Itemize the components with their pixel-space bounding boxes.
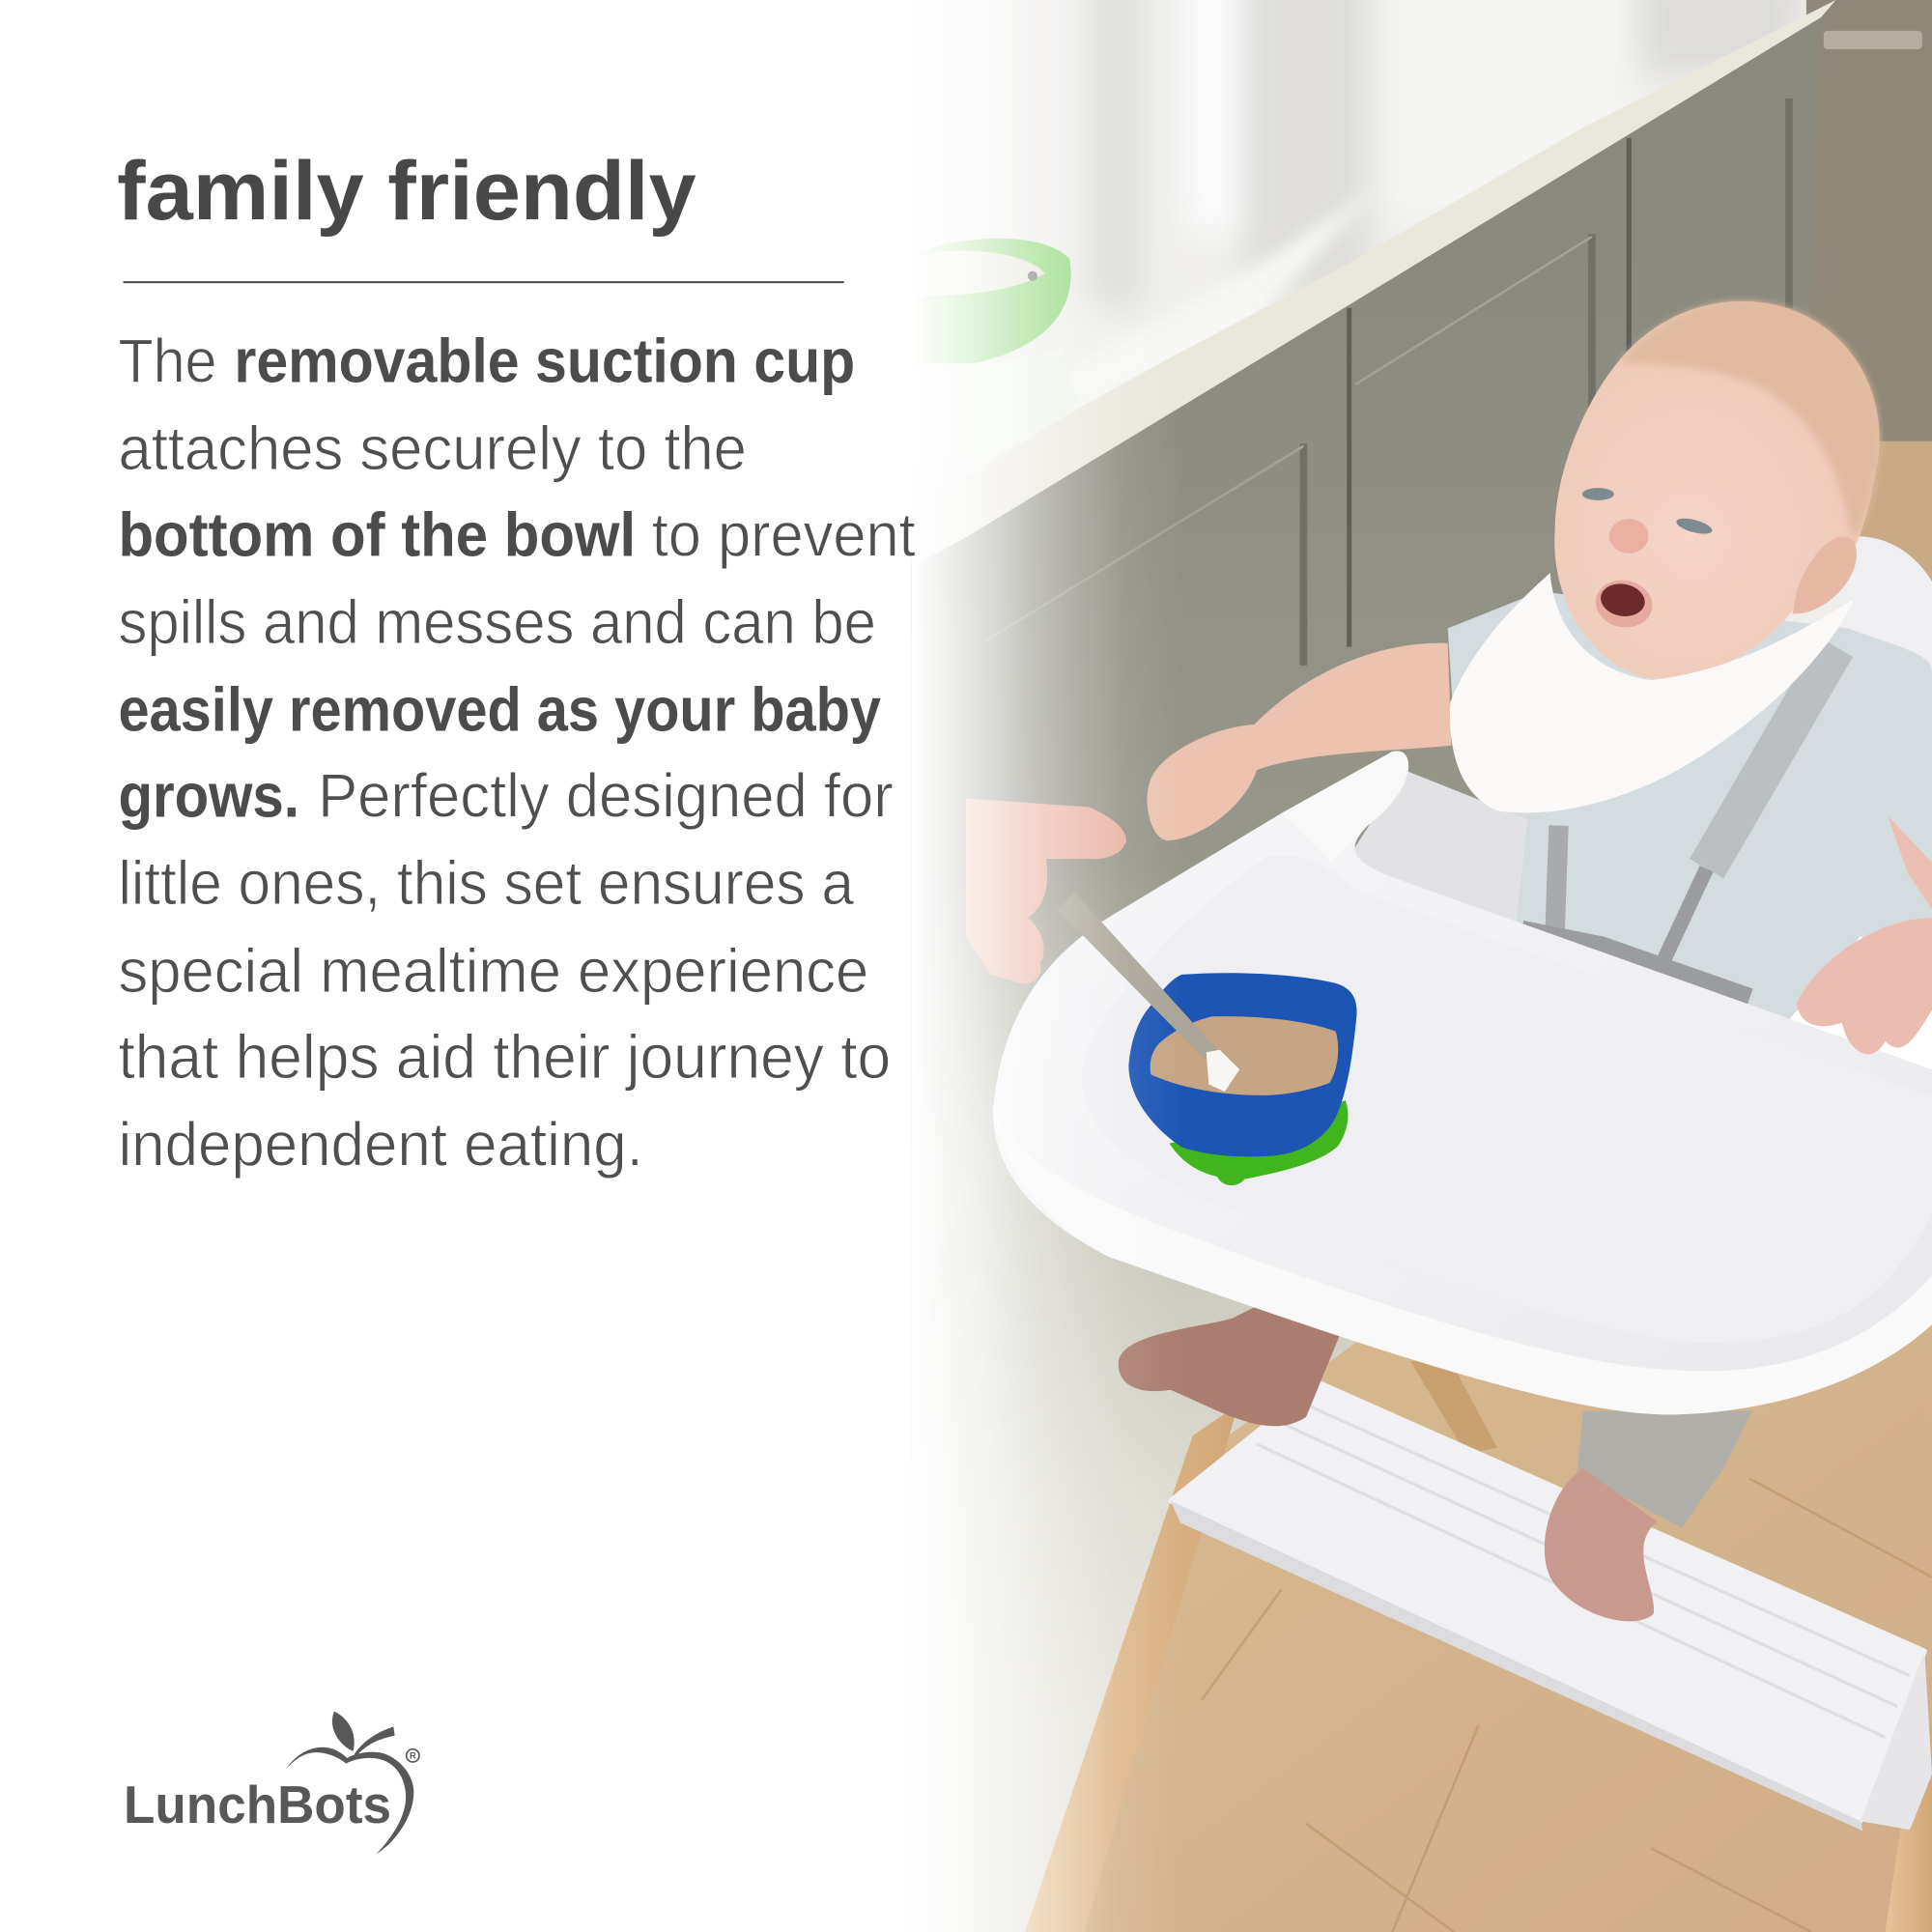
- body paragraph: to prevent: [652, 499, 916, 569]
- adult hand: [966, 799, 1126, 983]
- icon: apple swoosh: [286, 1712, 419, 1854]
- harness straps: [1521, 647, 1836, 998]
- body paragraph: removable suction cup: [234, 326, 855, 395]
- heading: family friendly: [117, 144, 696, 238]
- logo: LunchBots: [124, 1712, 419, 1854]
- logo: LunchBots: LunchBots: [124, 1775, 391, 1834]
- baby arm, left: [1147, 643, 1452, 840]
- baby head: [1554, 301, 1880, 678]
- baby leg and foot, left: [1119, 1293, 1341, 1426]
- high chair tray: [993, 751, 1932, 1414]
- body paragraph: little ones, this set ensures a: [118, 848, 854, 918]
- bowl food: [1151, 1016, 1338, 1095]
- body paragraph: [118, 326, 916, 1179]
- countertop edge: [912, 0, 1836, 567]
- panel: text column: [117, 144, 916, 1179]
- cabinets and lower wall: [912, 17, 1821, 1932]
- eyes: [1582, 488, 1614, 500]
- body paragraph: Perfectly designed for: [318, 761, 894, 831]
- body paragraph: bottom of the bowl: [118, 499, 636, 569]
- bib: [1450, 573, 1855, 812]
- photo: baby in high chair with bowl: [912, 0, 1932, 1932]
- footrest: [1171, 1382, 1932, 1831]
- kitchen wall and countertop: [912, 0, 1932, 640]
- bowl body: [1128, 973, 1357, 1156]
- mouth: [1592, 576, 1656, 632]
- spoon: [1057, 892, 1217, 1060]
- body paragraph: independent eating.: [118, 1110, 643, 1179]
- chair legs: [1025, 1355, 1932, 1932]
- cabinet seams and panels: [985, 99, 1789, 666]
- blue suction bowl: [1057, 892, 1357, 1185]
- nose: [1609, 519, 1649, 554]
- ear: [1793, 537, 1857, 613]
- body paragraph: The: [118, 326, 216, 395]
- hair: [1619, 301, 1880, 538]
- baby arm, right: [1888, 815, 1932, 909]
- baby leg and foot, right: [1545, 1410, 1752, 1621]
- body paragraph: attaches securely to the: [118, 413, 747, 483]
- icon: apple swoosh: R: [410, 1751, 416, 1761]
- seat recess: [1350, 770, 1528, 949]
- baby torso and shirt: [1448, 591, 1932, 1023]
- body paragraph: special mealtime experience: [118, 936, 868, 1006]
- white fade over photo: [912, 0, 1185, 1932]
- floor: [1060, 1282, 1932, 1932]
- body paragraph: grows.: [118, 761, 299, 831]
- chair back: [1836, 536, 1932, 690]
- baby hand on tray: [1797, 918, 1932, 1054]
- body paragraph: that helps aid their journey to: [118, 1022, 891, 1092]
- body paragraph: easily removed as your baby: [118, 674, 881, 744]
- body paragraph: spills and messes and can be: [118, 587, 876, 657]
- floorboard lines: [1202, 1479, 1932, 1932]
- far appliance and floor: [1805, 0, 1932, 585]
- green suction base: [1169, 1100, 1348, 1185]
- green bowl on counter: [918, 239, 1079, 462]
